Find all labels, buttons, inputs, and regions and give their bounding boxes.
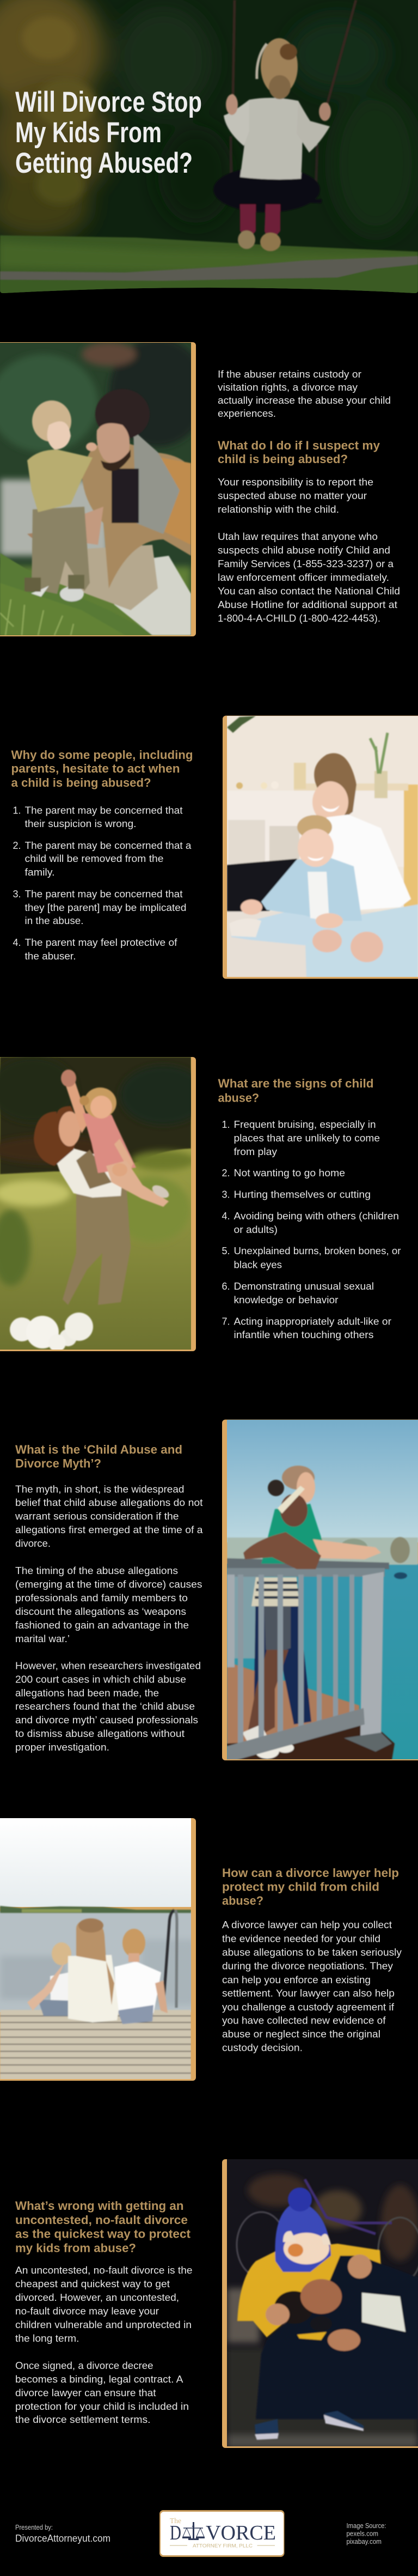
- numbered list: signs of abuse: 4.: [222, 1211, 230, 1222]
- photo frame: two boys playing outdoors: [222, 2159, 418, 2449]
- text: intro paragraph: experiences.: [218, 408, 276, 419]
- text: uncontested paragraph 1: [15, 2265, 193, 2344]
- text: lawyer help paragraph: the evidence needed for your child: [222, 1933, 380, 1944]
- numbered list: signs of abuse: or adults): [234, 1224, 278, 1235]
- text: uncontested paragraph 1: divorced. However, an uncontested,: [15, 2292, 179, 2303]
- numbered list: reasons for hesitating: child will be removed from the: [25, 853, 163, 864]
- text: lawyer help paragraph: A divorce lawyer can help you collect: [222, 1919, 392, 1930]
- numbered list: signs of abuse: 1.: [222, 1119, 230, 1130]
- text: Utah law paragraph: suspects child abuse notify Child and: [218, 545, 390, 556]
- text: Utah law paragraph: 1-800-4-A-CHILD (1-800-422-4453).: [218, 613, 380, 624]
- text: myth paragraph 2: professionals and family members to: [15, 1593, 188, 1603]
- numbered list: signs of abuse: Hurting themselves or cutting: [234, 1189, 371, 1200]
- text: Utah law paragraph: You can also contact the National Child: [218, 586, 400, 597]
- hero title: [15, 86, 202, 179]
- text: uncontested paragraph 2: divorce lawyer can ensure that: [15, 2387, 156, 2398]
- text: Utah law paragraph: Utah law requires that anyone who: [218, 531, 378, 542]
- heading: what are the signs: abuse?: [218, 1091, 259, 1105]
- numbered list: signs of abuse: 3.: [222, 1189, 230, 1200]
- presenter credit: DivorceAttorneyut.com: [15, 2533, 110, 2544]
- numbered list: reasons for hesitating: family.: [25, 867, 54, 878]
- text: myth paragraph 3: allegations had been made, the: [15, 1688, 159, 1699]
- icon: scales of justice: [182, 2522, 205, 2540]
- heading: why do some people hesitate: a child is being abused?: [11, 776, 151, 789]
- text: lawyer help paragraph: settlement. Your lawyer can also help: [222, 1988, 395, 1998]
- heading: how can a lawyer help: [222, 1866, 399, 1907]
- heading: the myth: [15, 1443, 182, 1470]
- heading: the myth: Divorce Myth’?: [15, 1457, 101, 1470]
- numbered list: signs of abuse: from play: [234, 1146, 277, 1157]
- text: lawyer help paragraph: abuse or neglect since the original: [222, 2029, 380, 2040]
- numbered list: reasons for hesitating: The parent may be concerned that: [25, 805, 183, 816]
- numbered list: reasons for hesitating: the abuser.: [25, 951, 76, 962]
- text: lawyer help paragraph: custody decision.: [222, 2042, 303, 2053]
- text: myth paragraph 1: allegations first emerged at the time of a: [15, 1524, 204, 1535]
- numbered list: signs of abuse: Avoiding being with others (children: [234, 1211, 399, 1222]
- numbered list: reasons for hesitating: The parent may feel protective of: [25, 937, 178, 948]
- numbered list: reasons for hesitating: The parent may be concerned that: [25, 889, 183, 900]
- numbered list: signs of abuse: Demonstrating unusual sexual: [234, 1281, 374, 1292]
- text: lawyer help paragraph: during the divorce negotiations. They: [222, 1960, 393, 1971]
- numbered list: signs of abuse: infantile when touching others: [234, 1329, 373, 1340]
- panel: uncontested no-fault divorce: [15, 2159, 418, 2449]
- text: responsibility paragraph: [218, 477, 373, 515]
- heading: why do some people hesitate: parents, hesitate to act when: [11, 762, 180, 775]
- text: lawyer help paragraph: you have collected new evidence of: [222, 2015, 386, 2026]
- heading: the myth: What is the ‘Child Abuse and: [15, 1443, 182, 1456]
- text: uncontested paragraph 1: An uncontested, no-fault divorce is the: [15, 2265, 193, 2276]
- text: responsibility paragraph: suspected abuse no matter your: [218, 490, 367, 501]
- presenter credit: [15, 2523, 110, 2544]
- logo: The Divorce Attorney Firm, PLLC: I: [192, 2522, 195, 2544]
- heading: what are the signs: What are the signs of child: [218, 1077, 373, 1090]
- heading: what do I do: What do I do if I suspect my: [218, 439, 380, 452]
- text: Utah law paragraph: [218, 531, 400, 624]
- text: myth paragraph 3: [15, 1661, 201, 1753]
- text: myth paragraph 2: (emerging at the time of divorce) causes: [15, 1579, 202, 1590]
- text: intro paragraph: [218, 369, 391, 419]
- logo: The Divorce Attorney Firm, PLLC: ATTORNEY FIRM, PLLC: [193, 2543, 253, 2549]
- numbered list: signs of abuse: Acting inappropriately adult-like or: [234, 1316, 391, 1327]
- text: uncontested paragraph 2: the divorce settlement terms.: [15, 2414, 150, 2425]
- text: uncontested paragraph 1: no-fault divorce may leave your: [15, 2306, 159, 2317]
- text: uncontested paragraph 2: becomes a binding, legal contract. A: [15, 2374, 183, 2385]
- heading: what are the signs: [218, 1077, 373, 1105]
- text: myth paragraph 2: discount the allegations as ‘weapons: [15, 1606, 186, 1617]
- footer: [15, 2510, 386, 2557]
- text: responsibility paragraph: Your responsibility is to report the: [218, 477, 373, 488]
- text: myth paragraph 3: and divorce myth’ caused professionals: [15, 1715, 198, 1726]
- heading: what do I do: [218, 439, 380, 466]
- text: myth paragraph 3: However, when researchers investigated: [15, 1661, 201, 1672]
- text: myth paragraph 1: The myth, in short, is the widespread: [15, 1484, 184, 1495]
- text: responsibility paragraph: relationship with the child.: [218, 504, 339, 515]
- text: uncontested paragraph 2: Once signed, a divorce decree: [15, 2360, 153, 2371]
- heading: why do some people hesitate: [11, 748, 193, 789]
- panel: how a divorce lawyer can help: [0, 1818, 402, 2081]
- image source credit: [346, 2522, 386, 2545]
- text: intro paragraph: If the abuser retains custody or: [218, 369, 361, 380]
- text: uncontested paragraph 2: [15, 2360, 189, 2425]
- heading: what's wrong with uncontested divorce: my kids from abuse?: [15, 2241, 136, 2255]
- hero title: My Kids From: [15, 117, 162, 149]
- numbered list: signs of abuse: 2.: [222, 1168, 230, 1178]
- hero photo: girl on swing: [0, 0, 418, 294]
- heading: what's wrong with uncontested divorce: [15, 2199, 191, 2255]
- heading: what do I do: child is being abused?: [218, 452, 348, 466]
- heading: what's wrong with uncontested divorce: uncontested, no-fault divorce: [15, 2213, 188, 2227]
- panel: what to do if you suspect abuse: [0, 338, 400, 637]
- heading: how can a lawyer help: How can a divorce lawyer help: [222, 1866, 399, 1880]
- panel: child abuse and divorce myth: [15, 1420, 418, 1763]
- hero title: Getting Abused?: [15, 147, 193, 179]
- text: myth paragraph 1: belief that child abuse allegations do not: [15, 1497, 202, 1508]
- text: myth paragraph 3: to dismiss abuse allegations without: [15, 1728, 185, 1739]
- numbered list: signs of abuse: places that are unlikely to come: [234, 1133, 380, 1144]
- logo: The Divorce Attorney Firm, PLLC: The: [170, 2517, 181, 2525]
- photo frame: mother lifting daughter in a field: [0, 1057, 207, 1352]
- photo frame: three children on a dock: [0, 1818, 196, 2081]
- text: uncontested paragraph 1: children vulnerable and unprotected in: [15, 2319, 192, 2330]
- numbered list: reasons for hesitating: 2.: [13, 840, 21, 851]
- heading: what's wrong with uncontested divorce: What’s wrong with getting an: [15, 2199, 184, 2213]
- text: myth paragraph 2: marital war.’: [15, 1633, 70, 1644]
- numbered list: reasons for hesitating: [13, 805, 192, 962]
- numbered list: signs of abuse: 6.: [222, 1281, 230, 1292]
- photo frame: woman and girl at a railing by the water: [222, 1420, 418, 1763]
- numbered list: reasons for hesitating: The parent may be concerned that a: [25, 840, 192, 851]
- text: lawyer help paragraph: you challenge a custody agreement if: [222, 2002, 395, 2013]
- logo: The Divorce Attorney Firm, PLLC: [159, 2510, 284, 2557]
- numbered list: signs of abuse: 7.: [222, 1316, 230, 1327]
- text: uncontested paragraph 1: the long term.: [15, 2333, 79, 2344]
- panel: why people hesitate: [11, 716, 418, 979]
- heading: how can a lawyer help: protect my child from child: [222, 1880, 379, 1894]
- photo frame: father and toddler: [0, 338, 207, 637]
- text: myth paragraph 3: 200 court cases in which child abuse: [15, 1674, 186, 1685]
- heading: why do some people hesitate: Why do some people, including: [11, 748, 193, 762]
- panel: signs of child abuse: [0, 1057, 401, 1352]
- image source credit: pexels.com: [346, 2529, 378, 2538]
- text: lawyer help paragraph: can help you enforce an existing: [222, 1974, 371, 1985]
- text: myth paragraph 2: The timing of the abuse allegations: [15, 1565, 178, 1576]
- numbered list: reasons for hesitating: their suspicion is wrong.: [25, 818, 136, 829]
- text: Utah law paragraph: law enforcement officer immediately.: [218, 572, 389, 583]
- numbered list: reasons for hesitating: in the abuse.: [25, 915, 84, 926]
- numbered list: signs of abuse: [222, 1119, 401, 1340]
- text: myth paragraph 2: [15, 1565, 202, 1644]
- logo: The Divorce Attorney Firm, PLLC: VORCE: [206, 2522, 276, 2544]
- numbered list: signs of abuse: Unexplained burns, broken bones, or: [234, 1246, 401, 1256]
- text: myth paragraph 3: researchers found that the ‘child abuse: [15, 1701, 195, 1712]
- text: Utah law paragraph: Family Services (1-855-323-3237) or a: [218, 558, 394, 569]
- text: myth paragraph 2: fashioned to gain an advantage in the: [15, 1620, 189, 1631]
- photo frame: mother and son on sofa: [223, 716, 418, 979]
- image source credit: Image Source:: [346, 2522, 386, 2530]
- heading: how can a lawyer help: abuse?: [222, 1894, 263, 1907]
- image source credit: pixabay.com: [346, 2537, 382, 2545]
- numbered list: reasons for hesitating: 3.: [13, 889, 21, 900]
- numbered list: signs of abuse: Frequent bruising, especially in: [234, 1119, 376, 1130]
- logo: The Divorce Attorney Firm, PLLC: D: [170, 2522, 181, 2544]
- text: uncontested paragraph 1: cheapest and quickest way to get: [15, 2279, 170, 2289]
- numbered list: reasons for hesitating: 4.: [13, 937, 21, 948]
- text: myth paragraph 1: [15, 1484, 204, 1549]
- hero banner: [0, 0, 418, 294]
- text: myth paragraph 1: divorce.: [15, 1538, 51, 1549]
- numbered list: reasons for hesitating: they [the parent] may be implicated: [25, 902, 186, 913]
- text: myth paragraph 1: warrant serious consideration if the: [15, 1511, 179, 1522]
- numbered list: signs of abuse: 5.: [222, 1246, 230, 1256]
- numbered list: signs of abuse: black eyes: [234, 1260, 282, 1271]
- text: Utah law paragraph: Abuse Hotline for additional support at: [218, 599, 397, 610]
- text: myth paragraph 3: proper investigation.: [15, 1742, 109, 1753]
- text: intro paragraph: actually increase the abuse your child: [218, 395, 391, 406]
- hero title: Will Divorce Stop: [15, 86, 202, 118]
- text: uncontested paragraph 2: protection for your child is included in: [15, 2401, 189, 2412]
- numbered list: reasons for hesitating: 1.: [13, 805, 21, 816]
- text: lawyer help paragraph: abuse allegations to be taken seriously: [222, 1947, 402, 1958]
- text: lawyer help paragraph: [222, 1919, 402, 2053]
- presenter credit: Presented by:: [15, 2523, 53, 2531]
- heading: what's wrong with uncontested divorce: as the quickest way to protect: [15, 2227, 191, 2240]
- numbered list: signs of abuse: Not wanting to go home: [234, 1168, 345, 1178]
- numbered list: signs of abuse: knowledge or behavior: [234, 1295, 339, 1305]
- text: intro paragraph: visitation rights, a divorce may: [218, 382, 358, 393]
